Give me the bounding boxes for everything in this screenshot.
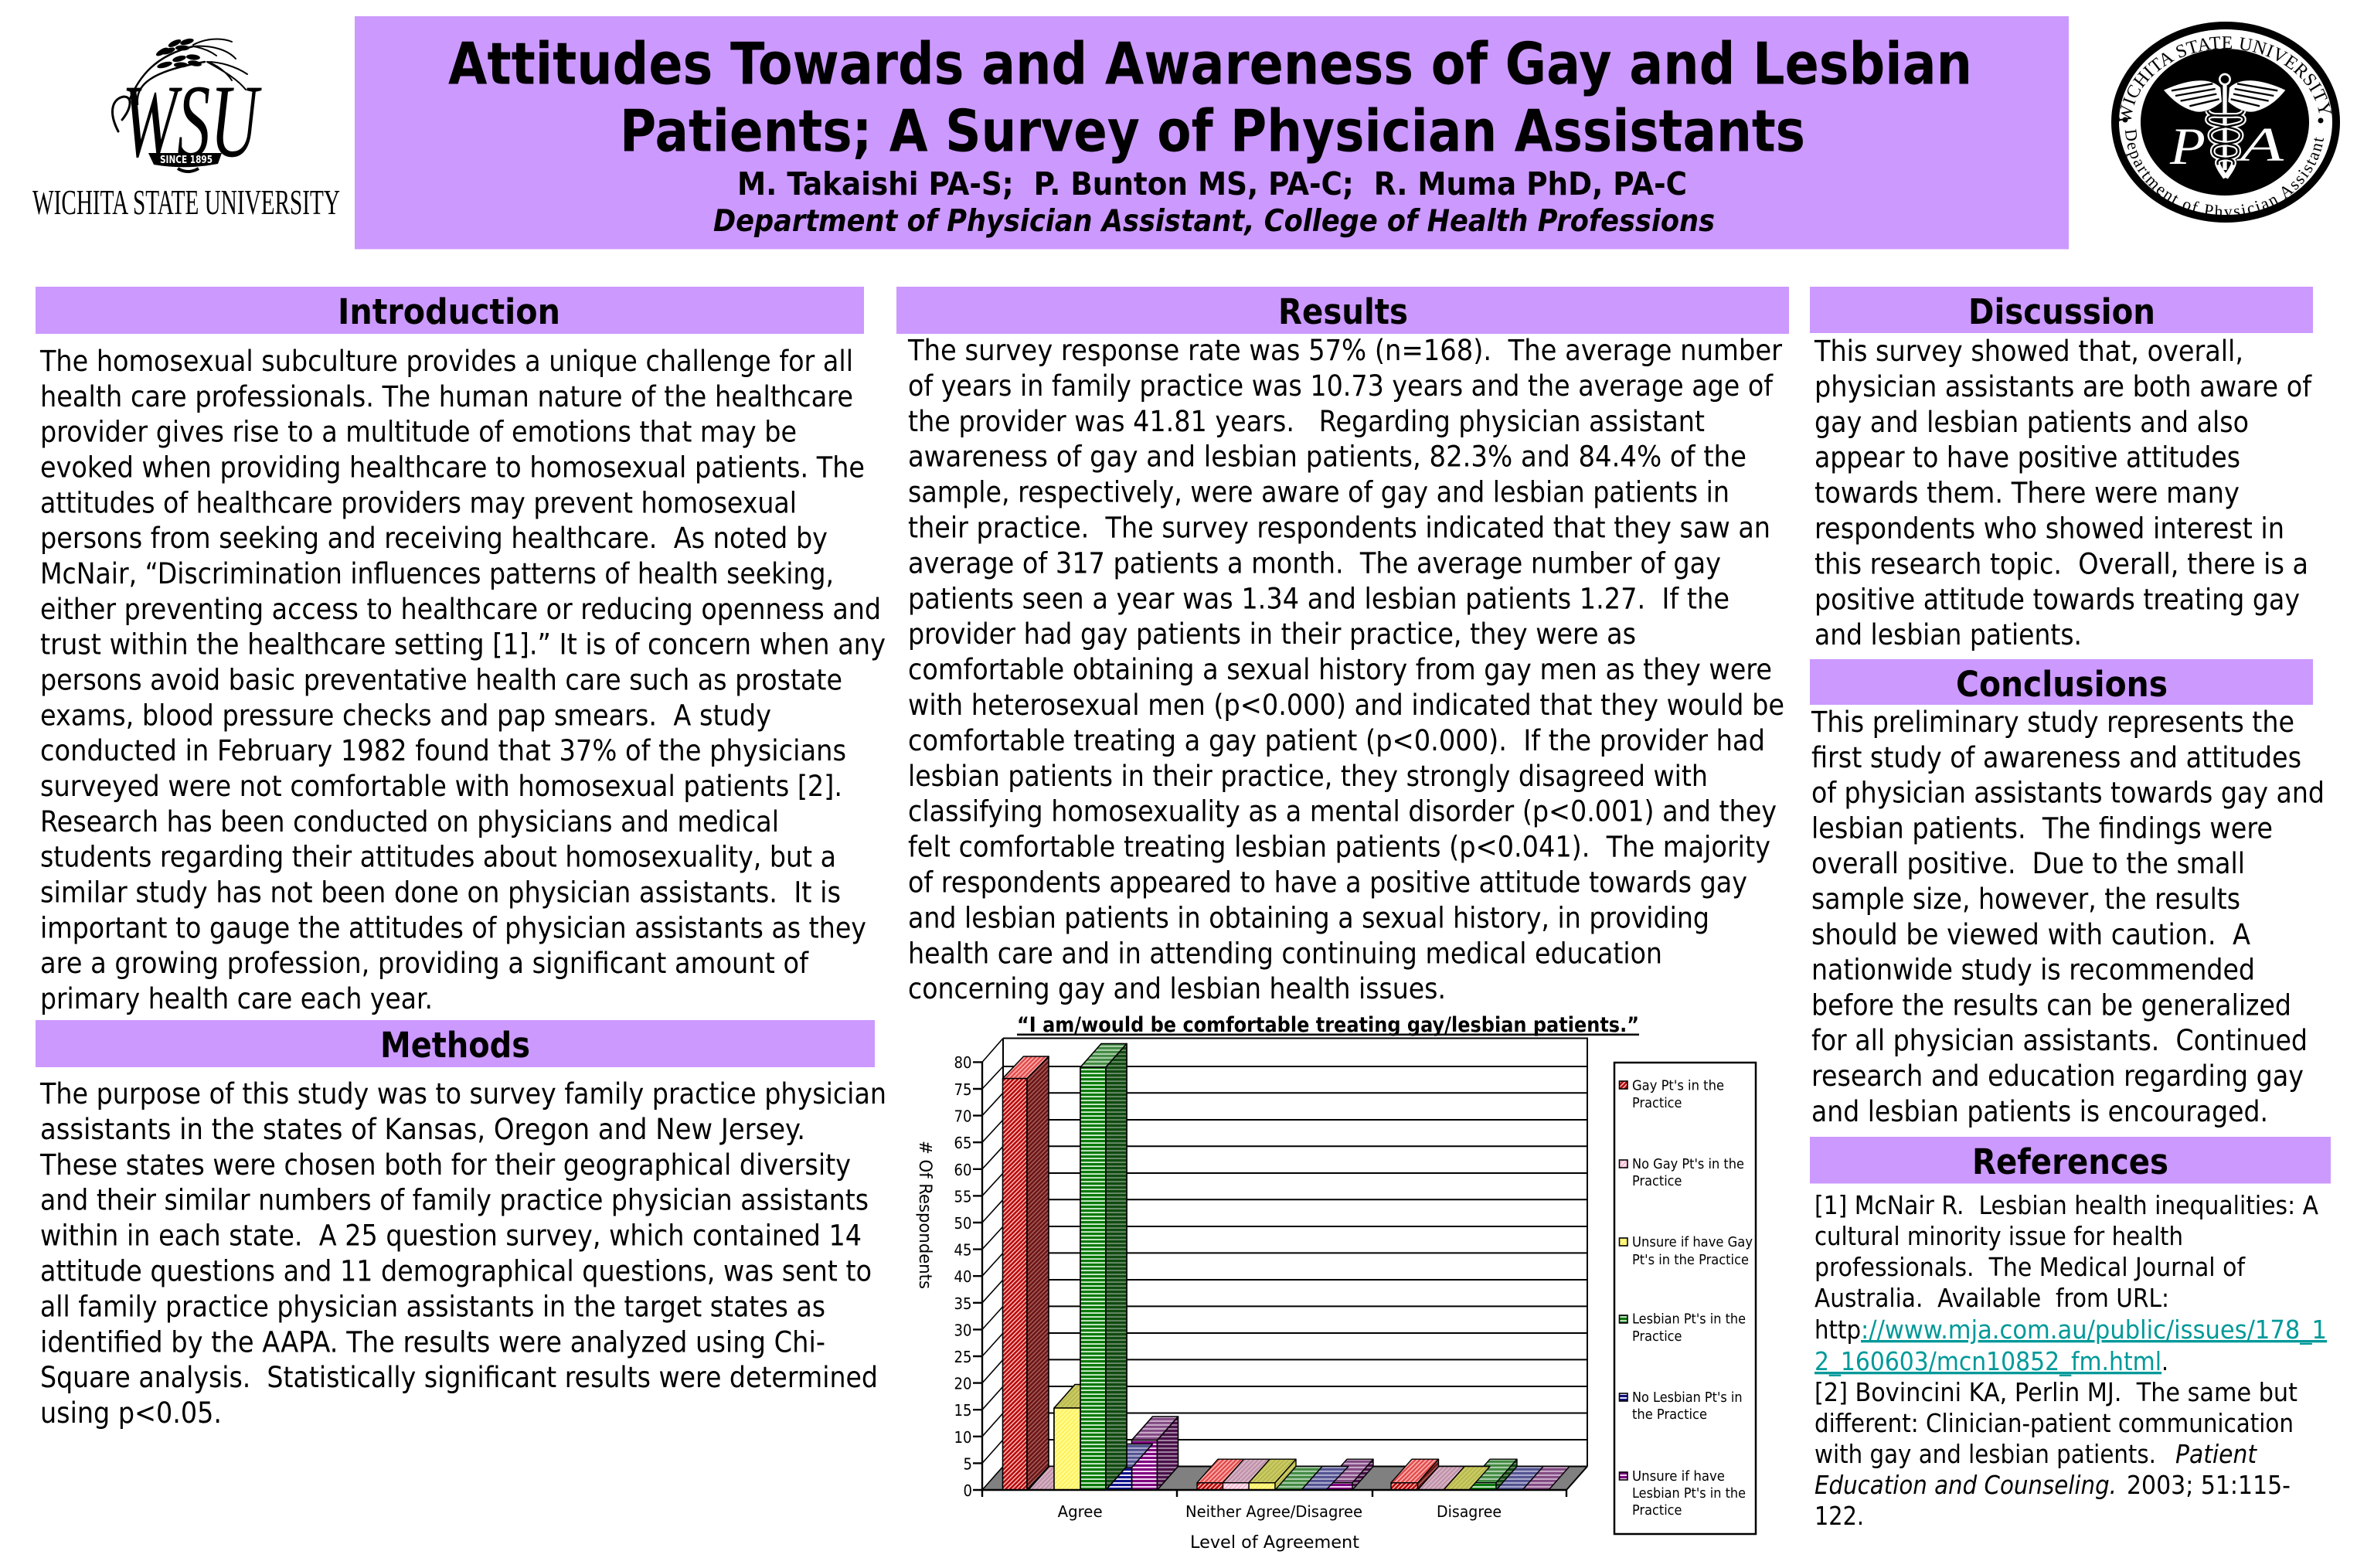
logo: Wichita State University xyxy=(32,37,340,222)
y axis labels: 0 xyxy=(963,1481,972,1500)
y axis labels: 35 xyxy=(954,1294,972,1313)
conclusions text: for all physician assistants. Continued xyxy=(1811,1024,2308,1057)
introduction text: evoked when providing healthcare to homosexual patients. The xyxy=(40,451,865,484)
legend: lesbian in practice: Lesbian Pt's in the xyxy=(1632,1311,1746,1328)
legend: unsure gay xyxy=(1620,1234,1753,1268)
x axis title: Level of Agreement xyxy=(1190,1533,1359,1553)
heading: references xyxy=(1810,1137,2331,1184)
heading: methods xyxy=(36,1020,875,1067)
methods text: assistants in the states of Kansas, Oregon and New Jersey. xyxy=(40,1113,805,1146)
legend: lesbian in practice: Practice xyxy=(1632,1328,1682,1345)
introduction text: attitudes of healthcare providers may prevent homosexual xyxy=(40,486,797,519)
letters P A: A xyxy=(2236,119,2285,172)
conclusions text: nationwide study is recommended xyxy=(1811,954,2255,987)
conclusions text: of physician assistants towards gay and xyxy=(1811,777,2325,810)
x axis labels: Agree xyxy=(1058,1502,1103,1521)
legend: no gay in practice xyxy=(1620,1156,1744,1189)
heading: introduction: Introduction xyxy=(338,291,560,332)
x axis labels: Neither Agree/Disagree xyxy=(1185,1502,1362,1521)
references text: . xyxy=(2161,1346,2168,1376)
discussion text: positive attitude towards treating gay xyxy=(1815,583,2300,616)
y axis labels: 55 xyxy=(954,1187,972,1206)
methods text: all family practice physician assistants in the target states as xyxy=(40,1290,825,1323)
discussion text: this research topic. Overall, there is a xyxy=(1815,547,2308,580)
results text: concerning gay and lesbian health issues. xyxy=(908,972,1446,1005)
results text xyxy=(907,334,1784,1005)
y axis labels: 70 xyxy=(954,1107,972,1126)
results text: provider had gay patients in their practice, they were as xyxy=(908,617,1636,651)
heading: results: Results xyxy=(1278,291,1408,332)
legend: unsure lesbian: Unsure if have xyxy=(1632,1468,1725,1485)
seal text bottom: Department of Physician Assistant xyxy=(2125,128,2324,215)
conclusions text: lesbian patients. The findings were xyxy=(1811,811,2273,845)
chart title: “I am/would be comfortable treating gay/lesbian patients.” xyxy=(1017,1013,1639,1037)
bars: agree xyxy=(1003,1043,1178,1490)
logo: Department of Physician Assistant seal xyxy=(2111,22,2340,223)
conclusions text: before the results can be generalized xyxy=(1811,988,2291,1022)
panel: introduction xyxy=(36,287,886,1015)
authors: M. Takaishi PA-S; P. Bunton MS, PA-C; R. Muma PhD, PA-C xyxy=(737,165,1687,202)
legend: no lesbian in practice: No Lesbian Pt's in xyxy=(1632,1389,1743,1406)
methods text: Square analysis. Statistically significant results were determined xyxy=(40,1361,878,1394)
panel: results xyxy=(896,287,1789,1553)
results text: patients seen a year was 1.34 and lesbian patients 1.27. If the xyxy=(908,582,1729,615)
y axis labels: 30 xyxy=(954,1321,972,1339)
results text: with heterosexual men (p<0.000) and indicated that they would be xyxy=(908,689,1784,722)
panel: discussion xyxy=(1810,287,2313,651)
discussion text xyxy=(1814,335,2312,651)
discussion text: towards them. There were many xyxy=(1815,477,2240,510)
legend: lesbian in practice xyxy=(1620,1311,1746,1345)
introduction text: health care professionals. The human nature of the healthcare xyxy=(40,380,853,413)
references text xyxy=(1815,1190,2327,1531)
methods text: within in each state. A 25 question survey, which contained 14 xyxy=(40,1219,862,1253)
introduction text: are a growing profession, providing a significant amount of xyxy=(40,947,809,980)
axes xyxy=(973,1062,1566,1497)
legend xyxy=(1614,1063,1756,1534)
y axis title: # Of Respondents xyxy=(915,1141,934,1289)
y axis labels: 5 xyxy=(963,1454,972,1473)
conclusions text: and lesbian patients is encouraged. xyxy=(1811,1095,2268,1128)
bars: disagree xyxy=(1391,1459,1570,1490)
department: Department of Physician Assistant, College of Health Professions xyxy=(713,204,1715,239)
letters P A xyxy=(2169,117,2285,175)
references text: http xyxy=(1815,1315,1861,1345)
y axis labels: 45 xyxy=(954,1241,972,1260)
bars: neither agree/disagree xyxy=(1197,1459,1373,1490)
introduction text: surveyed were not comfortable with homosexual patients [2]. xyxy=(40,770,842,803)
y axis labels: 50 xyxy=(954,1214,972,1233)
legend: gay in practice: Gay Pt's in the xyxy=(1632,1077,1724,1094)
methods text: The purpose of this study was to survey family practice physician xyxy=(39,1077,886,1111)
y axis labels: 10 xyxy=(954,1428,972,1447)
references text: Australia. Available from URL: xyxy=(1815,1283,2169,1313)
references text: professionals. The Medical Journal of xyxy=(1815,1252,2246,1282)
seal text top: WICHITA STATE UNIVERSITY xyxy=(2119,36,2332,122)
legend: unsure lesbian xyxy=(1620,1468,1746,1519)
introduction text: Research has been conducted on physicians and medical xyxy=(40,805,779,838)
y axis labels: 25 xyxy=(954,1348,972,1366)
results text: their practice. The survey respondents indicated that they saw an xyxy=(908,512,1770,544)
results text: lesbian patients in their practice, they strongly disagreed with xyxy=(908,760,1708,793)
references text: 2003; 51:115- xyxy=(2127,1470,2291,1500)
panel: methods xyxy=(36,1020,886,1430)
y axis labels: 75 xyxy=(954,1080,972,1099)
introduction text: important to gauge the attitudes of physician assistants as they xyxy=(40,911,866,944)
references text: Education and Counseling. xyxy=(1815,1470,2117,1500)
discussion text: respondents who showed interest in xyxy=(1815,512,2284,546)
panel: references xyxy=(1810,1137,2331,1531)
title xyxy=(448,29,1972,165)
bar chart xyxy=(915,1039,1756,1553)
methods text: identified by the AAPA. The results were analyzed using Chi- xyxy=(40,1325,825,1359)
introduction text: The homosexual subculture provides a unique challenge for all xyxy=(39,345,853,378)
introduction text: trust within the healthcare setting [1].” It is of concern when any xyxy=(40,628,886,662)
legend: gay in practice xyxy=(1620,1077,1724,1111)
y axis labels xyxy=(954,1053,972,1500)
results text: and lesbian patients in obtaining a sexual history, in providing xyxy=(908,901,1709,934)
references text: cultural minority issue for health xyxy=(1815,1221,2183,1251)
legend: unsure gay: Unsure if have Gay xyxy=(1632,1234,1753,1250)
references text: Patient xyxy=(2175,1439,2257,1469)
chart walls and grid xyxy=(982,1039,1587,1490)
conclusions text: research and education regarding gay xyxy=(1811,1060,2304,1093)
references text: 2_160603/mcn10852_fm.html xyxy=(1815,1346,2161,1376)
methods text: and their similar numbers of family practice physician assistants xyxy=(40,1184,869,1217)
references text: [2] Bovincini KA, Perlin MJ. The same but xyxy=(1815,1377,2297,1407)
conclusions text: This preliminary study represents the xyxy=(1811,706,2294,739)
results text: of respondents appeared to have a positive attitude towards gay xyxy=(908,866,1747,900)
discussion text: gay and lesbian patients and also xyxy=(1815,406,2249,439)
introduction text: persons avoid basic preventative health care such as prostate xyxy=(40,663,842,697)
heading: conclusions xyxy=(1810,659,2313,705)
x axis labels: Disagree xyxy=(1437,1502,1502,1521)
conclusions text: overall positive. Due to the small xyxy=(1811,847,2245,880)
university name: WICHITA STATE UNIVERSITY xyxy=(32,182,340,222)
y axis labels: 60 xyxy=(954,1161,972,1179)
WSU monogram: WSU xyxy=(122,64,262,179)
results text: felt comfortable treating lesbian patients (p<0.041). The majority xyxy=(908,831,1770,864)
methods text: These states were chosen both for their geographical diversity xyxy=(39,1148,851,1182)
references text: different: Clinician-patient communication xyxy=(1815,1408,2294,1438)
legend: no gay in practice: Practice xyxy=(1632,1173,1682,1189)
heading: results xyxy=(896,287,1789,334)
x axis labels xyxy=(1058,1502,1502,1521)
introduction text: persons from seeking and receiving healthcare. As noted by xyxy=(40,522,828,555)
legend: gay in practice: Practice xyxy=(1632,1095,1682,1111)
references text: ://www.mja.com.au/public/issues/178_1 xyxy=(1861,1315,2327,1345)
discussion text: physician assistants are both aware of xyxy=(1815,370,2312,403)
results text: classifying homosexuality as a mental disorder (p<0.001) and they xyxy=(908,795,1777,828)
methods text: using p<0.05. xyxy=(40,1396,222,1430)
methods text xyxy=(39,1077,886,1430)
results text: the provider was 41.81 years. Regarding physician assistant xyxy=(908,405,1705,438)
legend: no lesbian in practice: the Practice xyxy=(1632,1406,1707,1423)
letters P A: P xyxy=(2169,117,2206,175)
legend: no lesbian in practice xyxy=(1620,1389,1743,1423)
results text: comfortable treating a gay patient (p<0.000). If the provider had xyxy=(908,724,1765,757)
results text: awareness of gay and lesbian patients, 82.3% and 84.4% of the xyxy=(908,440,1746,474)
wheat emblem xyxy=(113,37,247,131)
results text: The survey response rate was 57% (n=168). The average number xyxy=(907,334,1783,367)
introduction text: primary health care each year. xyxy=(40,982,433,1015)
heading: methods: Methods xyxy=(380,1025,530,1066)
seal separators xyxy=(2122,117,2323,124)
discussion text: and lesbian patients. xyxy=(1815,618,2082,651)
references text: with gay and lesbian patients. xyxy=(1815,1439,2156,1469)
results text: sample, respectively, were aware of gay and lesbian patients in xyxy=(908,476,1729,509)
methods text: attitude questions and 11 demographical questions, was sent to xyxy=(40,1255,872,1287)
y axis labels: 15 xyxy=(954,1401,972,1420)
header banner xyxy=(355,16,2069,249)
conclusions text: first study of awareness and attitudes xyxy=(1811,741,2301,774)
introduction text: exams, blood pressure checks and pap smears. A study xyxy=(40,699,771,732)
references text: 122. xyxy=(1815,1501,1864,1531)
heading: discussion xyxy=(1810,287,2313,333)
results text: comfortable obtaining a sexual history from gay men as they were xyxy=(908,653,1772,686)
heading: introduction xyxy=(36,287,864,334)
legend: unsure lesbian: Practice xyxy=(1632,1502,1682,1519)
discussion text: appear to have positive attitudes xyxy=(1815,441,2240,474)
y axis labels: 65 xyxy=(954,1134,972,1152)
results text: average of 317 patients a month. The average number of gay xyxy=(908,546,1721,580)
caduceus xyxy=(2164,73,2285,178)
legend: unsure gay: Pt's in the Practice xyxy=(1632,1252,1749,1268)
introduction text: students regarding their attitudes about homosexuality, but a xyxy=(40,841,836,874)
legend: unsure lesbian: Lesbian Pt's in the xyxy=(1632,1485,1746,1502)
introduction text: similar study has not been done on physician assistants. It is xyxy=(40,876,841,909)
ribbon: since 1895 xyxy=(148,153,222,172)
introduction text xyxy=(39,345,886,1015)
heading: discussion: Discussion xyxy=(1968,291,2155,332)
redraw green and yellow stacking xyxy=(1054,1043,1127,1490)
references text: [1] McNair R. Lesbian health inequalities: A xyxy=(1815,1190,2318,1220)
heading: conclusions: Conclusions xyxy=(1956,664,2168,705)
heading: references: References xyxy=(1972,1141,2168,1182)
legend: no gay in practice: No Gay Pt's in the xyxy=(1632,1156,1744,1172)
y axis labels: 40 xyxy=(954,1267,972,1286)
introduction text: McNair, “Discrimination influences patterns of health seeking, xyxy=(40,557,834,590)
conclusions text xyxy=(1811,706,2325,1128)
title: Attitudes Towards and Awareness of Gay and Lesbian xyxy=(448,29,1972,97)
introduction text: either preventing access to healthcare or reducing openness and xyxy=(40,593,881,626)
introduction text: provider gives rise to a multitude of emotions that may be xyxy=(40,416,797,449)
results text: health care and in attending continuing medical education xyxy=(908,937,1662,970)
ribbon: since 1895: SINCE 1895 xyxy=(160,155,213,166)
discussion text: This survey showed that, overall, xyxy=(1814,335,2243,368)
y axis labels: 20 xyxy=(954,1375,972,1393)
panel: conclusions xyxy=(1810,659,2325,1128)
conclusions text: sample size, however, the results xyxy=(1811,883,2240,916)
conclusions text: should be viewed with caution. A xyxy=(1811,918,2250,951)
title: Patients; A Survey of Physician Assistants xyxy=(620,97,1805,165)
y axis labels: 80 xyxy=(954,1053,972,1072)
introduction text: conducted in February 1982 found that 37% of the physicians xyxy=(40,734,846,767)
results text: of years in family practice was 10.73 years and the average age of xyxy=(908,369,1774,403)
